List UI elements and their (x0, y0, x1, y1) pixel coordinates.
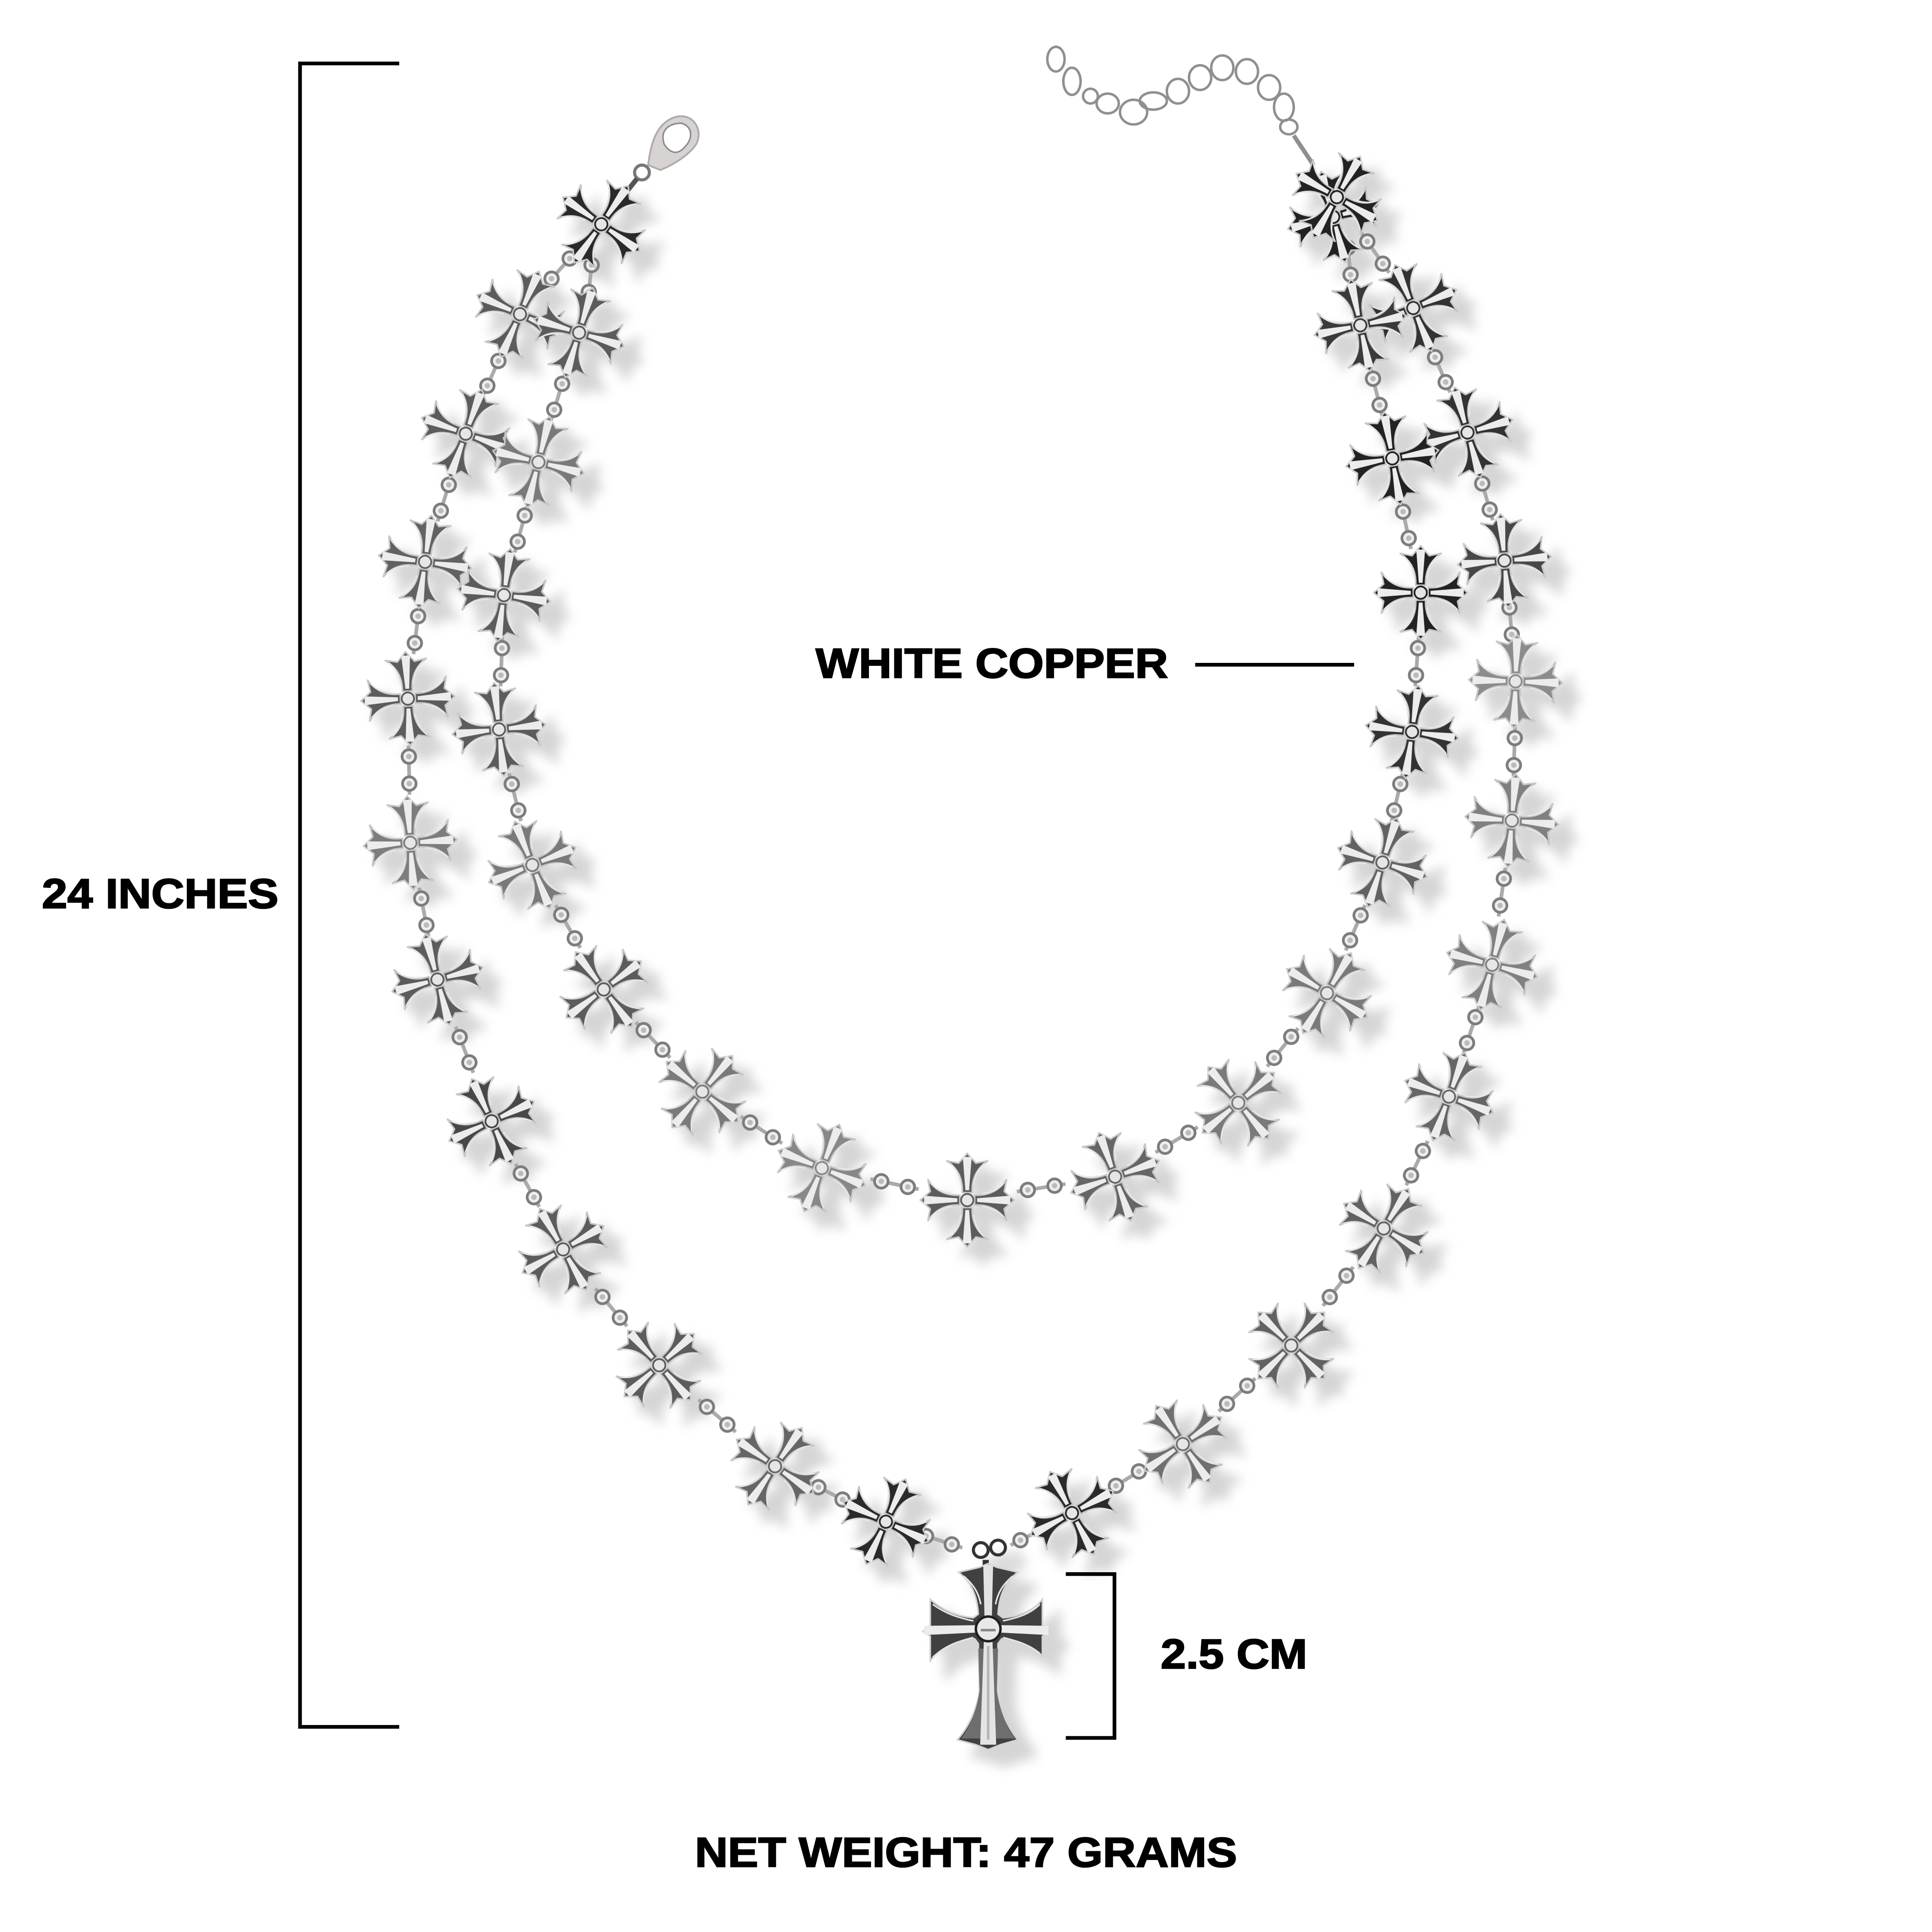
cross charms on both strands (358, 133, 1564, 1750)
lobster clasp (622, 116, 699, 197)
white copper leader line (1195, 664, 1354, 665)
label: 2.5 cm: 2.5 CM (1160, 1631, 1307, 1677)
connecting links (402, 228, 1522, 1554)
left dimension bracket (300, 64, 399, 1727)
pendant dimension bracket (1066, 1574, 1115, 1738)
label: net weight: NET WEIGHT: 47 GRAMS (695, 1829, 1237, 1876)
label: 24 inches: 24 INCHES (42, 870, 279, 917)
inner strand crosses (447, 270, 1467, 1247)
necklace (358, 47, 1564, 1750)
pendant bail (973, 1540, 1005, 1570)
extender chain (1047, 47, 1313, 165)
cross pendant (923, 1564, 1050, 1750)
label: white copper: WHITE COPPER (816, 640, 1168, 687)
outer strand crosses (358, 133, 1564, 1584)
cast shadow of necklace (375, 148, 1580, 1765)
